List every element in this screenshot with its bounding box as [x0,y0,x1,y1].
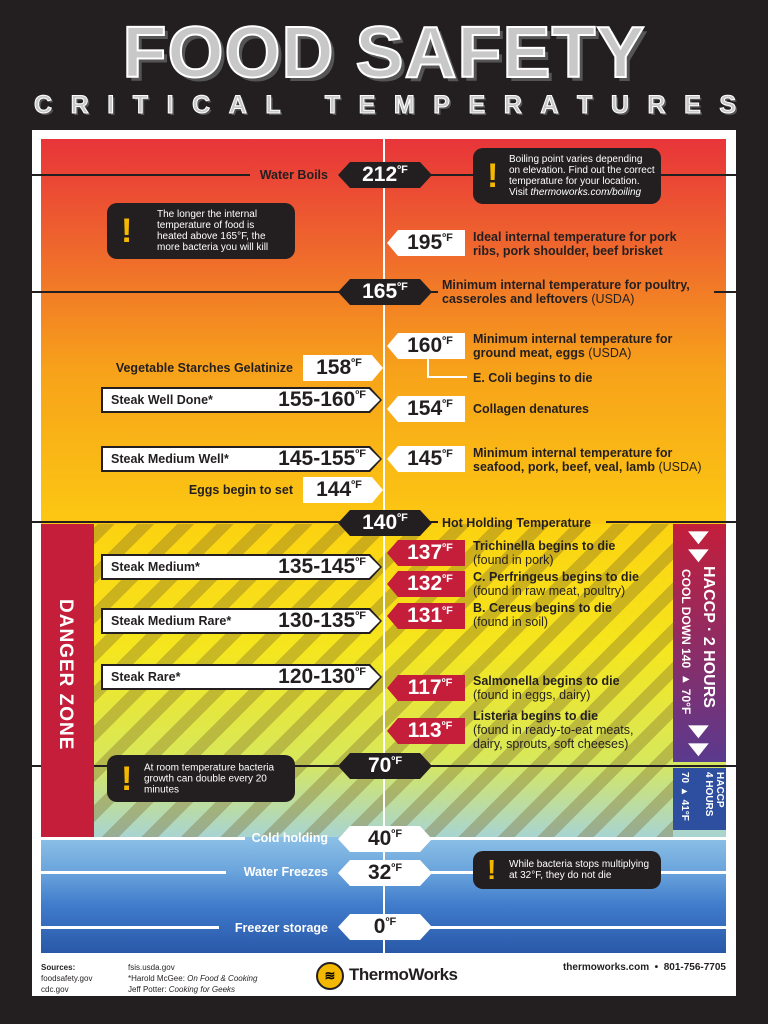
steak medium well: 145-155ºF [278,447,366,470]
text: 130-135ºF [278,609,366,632]
callout: boiling point [473,148,661,204]
callout: longer internal temp: temperature of food is [157,220,254,231]
32 row: Water Freezes [244,865,328,879]
text: 132ºF [407,572,453,595]
160 row [387,333,465,359]
212 row: Water Boils [260,168,328,182]
144 row: Eggs begin to set [189,483,293,497]
text: Hot Holding Temperature [442,516,591,530]
text: 40ºF [368,827,402,850]
subtitle [34,91,737,119]
horizontal lines [32,174,250,176]
subtitle: I [107,91,114,119]
0 row: Freezer storage [235,921,328,935]
callout: boiling point: Visit thermoworks.com/boiling [509,187,641,198]
steak well done: 155-160ºF [278,388,366,411]
text: 0ºF [374,915,396,938]
text: ribs, pork shoulder, beef brisket [473,244,663,258]
steak boxes: 135-145ºF [278,555,366,578]
subtitle: C [34,91,52,119]
text: B. Cereus begins to die [473,601,612,615]
HACCP 2 hours bar: ▼ [681,718,716,743]
subtitle: E [684,91,701,119]
text: ground meat, eggs (USDA) [473,346,631,360]
160 row: 160ºF [407,334,453,357]
footer sources: cdc.gov [41,985,69,994]
callout: boiling point: Boiling point varies depending [509,154,642,165]
logo: ThermoWorks [349,965,458,984]
text: Minimum internal temperature for poultry, [442,278,690,292]
callout: boiling point: temperature for your location. [509,176,640,187]
text: (found in pork) [473,553,554,567]
text: fsis.usda.gov [128,963,175,972]
footer sources: Sources: [41,963,75,972]
40 row: Cold holding [252,831,328,845]
text: Salmonella begins to die [473,674,620,688]
chart background gradient [41,139,726,524]
subtitle: T [325,91,340,119]
195 row: 195ºF [407,231,453,254]
HACCP 4 hours bar: HACCP [714,772,725,808]
140 row [338,510,432,536]
callout: longer internal temp: heated above 165°F, the [157,231,266,242]
165 row: 165ºF [362,280,408,303]
pathogen tags [387,540,465,566]
text: seafood, pork, beef, veal, lamb (USDA) [473,460,702,474]
HACCP 4 hours bar [673,768,726,830]
danger zone bar: DANGER ZONE [55,599,76,750]
HACCP 2 hours bar: HACCP · 2 HOURS [700,566,717,708]
text: Collagen denatures [473,402,589,416]
text: 144ºF [316,478,362,501]
text: Jeff Potter: Cooking for Geeks [128,985,235,994]
text: Trichinella begins to die [473,539,615,553]
text: (found in ready-to-eat meats, [473,723,634,737]
text: 32ºF [368,861,402,884]
text: Steak Rare* [111,670,180,684]
text: 117ºF [408,676,452,699]
callout: boiling point: on elevation. Find out the correct [509,165,655,176]
steak medium well [101,446,382,472]
70 row: 70ºF [368,754,402,777]
contact: thermoworks.com • 801-756-7705 [563,962,726,973]
steak well done: Steak Well Done* [111,393,213,407]
text: C. Perfringeus begins to die [473,570,639,584]
center line [383,139,385,953]
callout: longer internal temp: The longer the internal [157,209,257,220]
165 row [338,279,432,305]
HACCP 4 hours bar: 4 HOURS [703,772,714,816]
pathogen tags: 137ºF [407,541,453,564]
footer sources [41,963,92,994]
subtitle: R [504,91,522,119]
text: E. Coli begins to die [473,371,592,385]
danger zone background [41,524,726,837]
subtitle: I [167,91,174,119]
70 row [338,753,432,779]
steak boxes [101,554,382,580]
HACCP 4 hours bar: 70 ▸ 41°F [679,772,690,821]
subtitle: E [359,91,375,119]
154 row: 154ºF [407,397,453,420]
text: 212ºF [362,163,408,186]
subtitle: T [577,91,592,119]
callout: freezing [473,851,661,889]
subtitle: A [540,91,558,119]
HACCP 2 hours bar: ▼ [681,542,716,567]
logo [316,962,458,990]
HACCP 2 hours bar: COOL DOWN 140 ▸ 70°F [679,569,693,714]
154 row [387,396,465,422]
subtitle: L [265,91,281,119]
subtitle: T [133,91,148,119]
text: Ideal internal temperature for pork [473,230,677,244]
text: 113ºF [408,719,452,742]
145 row: 145ºF [407,447,453,470]
text: Minimum internal temperature for [473,446,672,460]
callout: freezing: at 32°F, they do not die [509,870,611,881]
140 row: 140ºF [362,511,408,534]
callout: room temp: growth can double every 20 [144,773,267,784]
title: FOOD SAFETY [122,13,646,93]
text: casseroles and leftovers (USDA) [442,292,634,306]
HACCP 2 hours bar: ▼ [681,524,716,549]
callout: boiling point: ! [487,157,498,195]
subtitle: R [647,91,666,119]
subtitle: C [192,91,210,119]
callout: room temp [107,755,295,802]
subtitle: U [611,91,629,119]
steak well done [101,387,382,413]
subtitle: R [71,91,89,119]
text: Listeria begins to die [473,709,598,723]
callout: longer internal temp [107,203,295,259]
HACCP 2 hours bar [673,524,726,762]
steak boxes: Steak Medium* [111,560,200,574]
subtitle: A [229,91,247,119]
158 row: Vegetable Starches Gelatinize [116,361,293,375]
text: Minimum internal temperature for [473,332,672,346]
subtitle: S [719,91,736,119]
callout: freezing: While bacteria stops multiplying [509,859,649,870]
text: (found in raw meat, poultry) [473,584,625,598]
callout: freezing: ! [487,854,496,885]
text: 131ºF [407,604,453,627]
subtitle: M [394,91,415,119]
text: dairy, sprouts, soft cheeses) [473,737,628,751]
logo: ≋ [325,968,335,983]
footer sources: foodsafety.gov [41,974,92,983]
steak medium well: Steak Medium Well* [111,452,229,466]
callout: longer internal temp: ! [121,212,132,250]
HACCP 2 hours bar: ▼ [681,736,716,761]
text: (found in soil) [473,615,548,629]
subtitle: P [433,91,450,119]
text: (found in eggs, dairy) [473,688,590,702]
callout: room temp: minutes [144,784,179,795]
danger zone bar [41,524,94,837]
callout: room temp: At room temperature bacteria [144,762,274,773]
subtitle: E [468,91,485,119]
195 row [387,230,465,256]
white panel [32,130,736,996]
text: 158ºF [316,356,362,379]
text: Steak Medium Rare* [111,614,231,628]
cold zone background [41,837,726,953]
callout: longer internal temp: more bacteria you will kill [157,242,268,253]
text: 120-130ºF [278,665,366,688]
145 row [387,446,465,472]
text: *Harold McGee: On Food & Cooking [128,974,257,983]
callout: room temp: ! [121,760,132,798]
